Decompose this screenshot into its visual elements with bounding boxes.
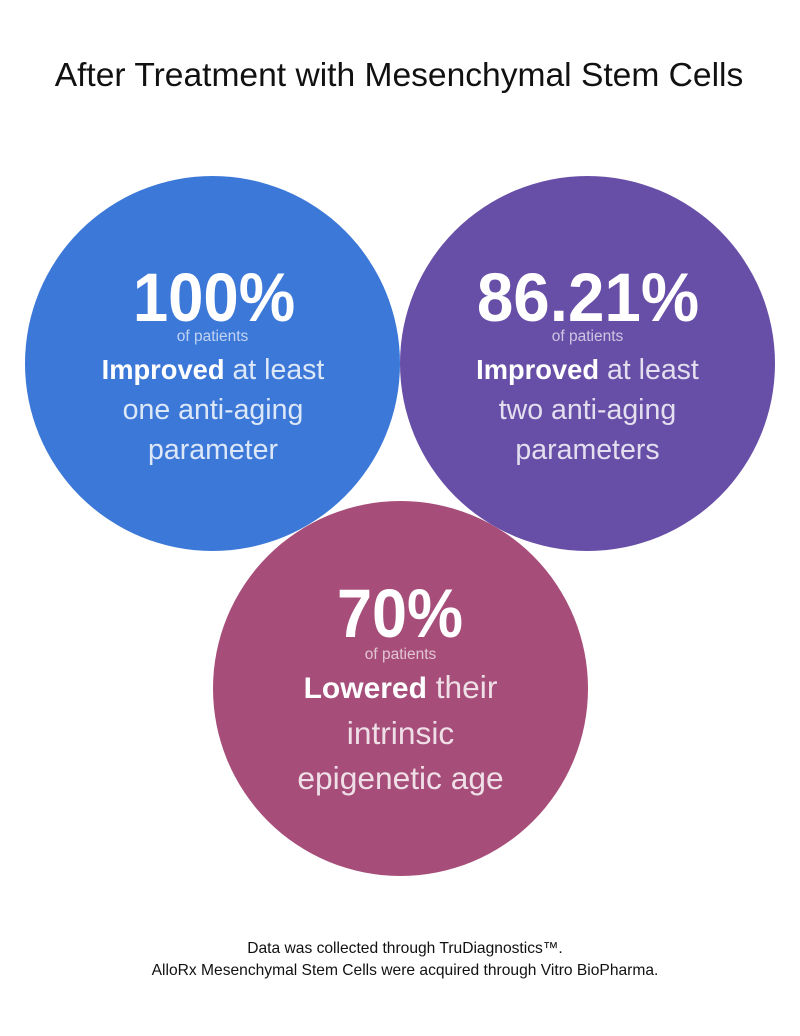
label: of patients: of patients [177, 328, 248, 344]
text: improved at least one parameter: one anti-aging [123, 394, 303, 426]
text: improved at least two parameters: Improved at least [476, 354, 699, 386]
circle: 100% of patients [25, 176, 400, 551]
label: of patients: of patients [365, 646, 436, 662]
text: improved at least one parameter: parameter [148, 434, 278, 466]
footnote: Data was collected through TruDiagnostics™. [247, 940, 563, 957]
circle: 86.21% of patients [400, 176, 775, 551]
text: lowered intrinsic epigenetic age: epigenetic age [297, 760, 504, 796]
text: lowered intrinsic epigenetic age [297, 668, 504, 796]
stat: 100%: 100% [133, 259, 295, 336]
text: improved at least one parameter: Improved at least [102, 354, 324, 386]
stat: 70%: 70% [337, 575, 463, 652]
stat: 86.21%: 86.21% [477, 259, 699, 336]
title: After Treatment with Mesenchymal Stem Cells [55, 57, 743, 94]
footnote [152, 940, 658, 979]
text: improved at least one parameter [102, 354, 324, 466]
text: lowered intrinsic epigenetic age: Lowered their [304, 668, 497, 704]
footnote: AlloRx Mesenchymal Stem Cells were acquired through Vitro BioPharma. [152, 962, 658, 979]
label: of patients: of patients [552, 328, 623, 344]
text: improved at least two parameters: parameters [515, 434, 660, 466]
text: lowered intrinsic epigenetic age: intrinsic [347, 714, 454, 750]
text: improved at least two parameters [476, 354, 699, 466]
text: improved at least two parameters: two anti-aging [499, 394, 676, 426]
circle: 70% of patients [213, 501, 588, 876]
